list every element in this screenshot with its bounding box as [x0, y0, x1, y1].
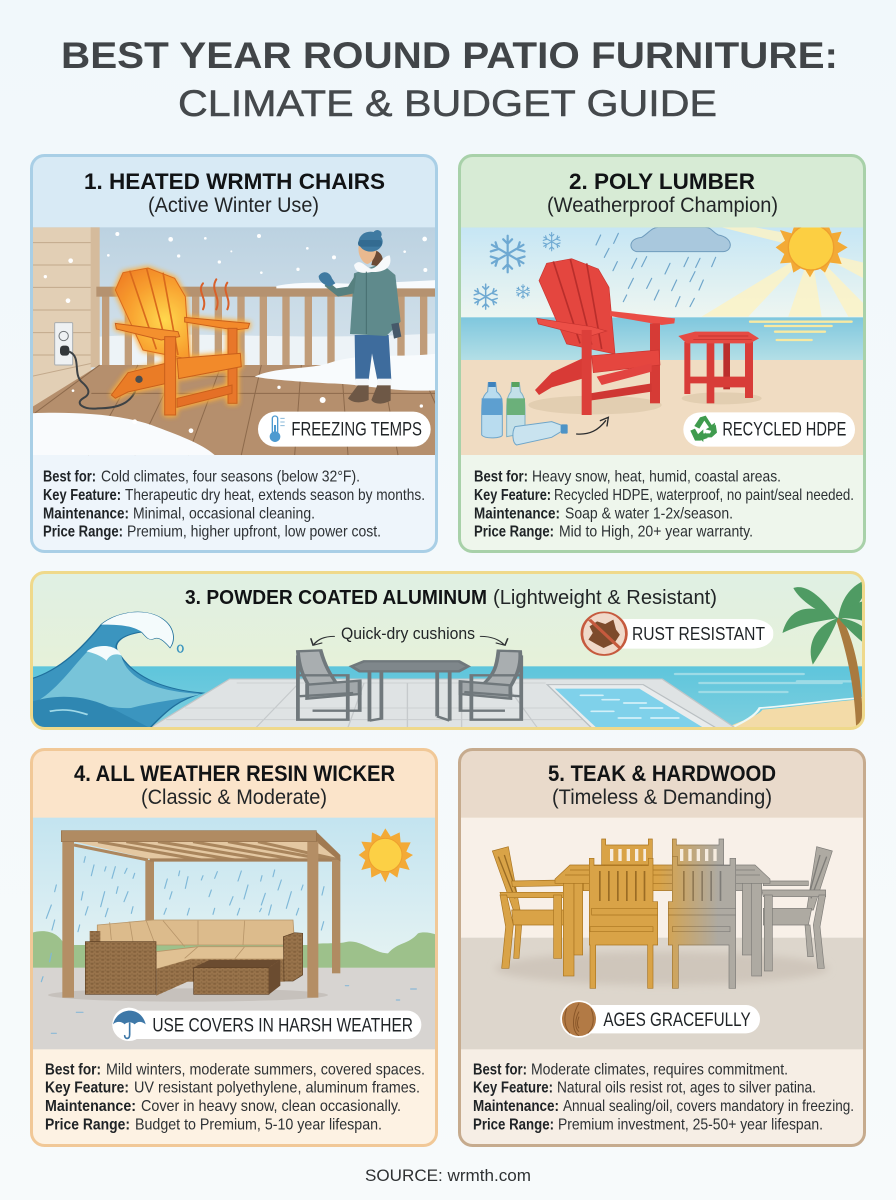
details: panel 1 [43, 469, 425, 541]
details: panel 4: Cover in heavy snow, clean occasionally. [141, 1098, 401, 1115]
details: panel 4: Price Range: [45, 1116, 130, 1133]
details: panel 5 [473, 1061, 854, 1133]
heading: panel 5: (Timeless & Demanding) [552, 786, 772, 809]
heading: panel 4 [74, 761, 395, 809]
illustration: aging teak dining set [457, 818, 865, 1049]
rain [41, 857, 324, 982]
badge: recycled hdpe [683, 412, 855, 447]
details: panel 1: Maintenance: [43, 505, 129, 522]
illustration: winter deck with heated chair [30, 227, 440, 455]
icon: recycled bottles [482, 382, 568, 445]
details: panel 4: Key Feature: [45, 1080, 129, 1097]
details: panel 5: Premium investment, 25-50+ year lifespan. [558, 1116, 823, 1133]
details: panel 4: Maintenance: [45, 1098, 136, 1115]
pool [547, 685, 716, 728]
badge: use covers [112, 1008, 421, 1041]
heading: panel 1: 1. HEATED WRMTH CHAIRS [84, 169, 385, 194]
right armchair [762, 847, 832, 971]
details: panel 2: Price Range: [474, 524, 554, 541]
source line: SOURCE: wrmth.com [365, 1166, 531, 1185]
details: panel 5: Moderate climates, requires commitment. [531, 1061, 788, 1078]
icon: wood grain [560, 1000, 598, 1038]
details: panel 1: Minimal, occasional cleaning. [133, 505, 315, 522]
details: panel 5: Natural oils resist rot, ages to silver patina. [557, 1080, 816, 1097]
details: panel 1: Premium, higher upfront, low power cost. [127, 524, 381, 541]
heading: panel 2 [547, 169, 778, 217]
heading: panel 3 [185, 586, 717, 609]
badge: ages gracefully: AGES GRACEFULLY [603, 1010, 751, 1031]
red side table [678, 332, 759, 403]
left armchair [492, 847, 563, 968]
front chairs [589, 857, 736, 988]
icon: rain cloud [596, 227, 730, 307]
details: panel 2: Key Feature: [474, 487, 551, 504]
panel: teak and hardwood [457, 748, 866, 1148]
title [61, 35, 838, 124]
back chairs [602, 839, 724, 865]
wave [28, 612, 203, 728]
snowfall [44, 232, 427, 433]
details: panel 1: Cold climates, four seasons (below 32°F). [101, 469, 360, 486]
details: panel 2: Heavy snow, heat, humid, coastal areas. [532, 469, 781, 486]
label: quick-dry cushions: Quick-dry cushions [341, 625, 475, 643]
heading: panel 4: (Classic & Moderate) [141, 786, 327, 809]
details: panel 5: Maintenance: [473, 1098, 559, 1115]
icon: wall outlet and cord [55, 323, 139, 409]
details: panel 5: Best for: [473, 1061, 527, 1078]
left chair [298, 650, 360, 720]
details: panel 1: Therapeutic dry heat, extends season by months. [125, 487, 425, 504]
details: panel 2: Maintenance: [474, 505, 560, 522]
details: panel 5: Key Feature: [473, 1080, 553, 1097]
details: panel 4: Budget to Premium, 5-10 year lifespan. [135, 1116, 382, 1133]
icons: snowflakes [474, 232, 560, 309]
panel: poly lumber [457, 154, 867, 553]
right chair [461, 651, 521, 720]
heading: panel 2: (Weatherproof Champion) [547, 194, 778, 217]
details: panel 1: Price Range: [43, 524, 123, 541]
icon: heat waves [201, 279, 229, 309]
icon: no rust [582, 612, 626, 655]
furniture: aluminum table and chairs [298, 650, 521, 721]
title: BEST YEAR ROUND PATIO FURNITURE: [61, 35, 838, 76]
badge: freezing temps [258, 412, 431, 447]
heated chair [111, 268, 250, 415]
icon: thermometer [270, 416, 285, 442]
red adirondack chair [535, 259, 675, 415]
panel: powder coated aluminum [28, 568, 882, 733]
icon: umbrella [113, 1011, 146, 1038]
arrows: cushion callouts [311, 636, 508, 645]
details: panel 4: Mild winters, moderate summers, covered spaces. [106, 1061, 425, 1078]
badge: use covers: USE COVERS IN HARSH WEATHER [152, 1015, 413, 1036]
icon: recycle [690, 416, 717, 442]
heading: panel 3: 3. POWDER COATED ALUMINUM [185, 586, 487, 609]
details: panel 2: Best for: [474, 469, 528, 486]
illustration: pergola and wicker sectional [30, 818, 440, 1049]
table [352, 661, 468, 721]
icon: sun [776, 228, 848, 278]
heading: panel 1: (Active Winter Use) [148, 194, 319, 217]
heading: panel 1 [84, 169, 385, 217]
details: panel 1: Best for: [43, 469, 96, 486]
illustration: pool deck and wave [28, 568, 882, 733]
table [555, 865, 770, 976]
wicker coffee table [193, 960, 280, 994]
details: panel 4: Best for: [45, 1061, 101, 1078]
details: panel 2: Mid to High, 20+ year warranty. [559, 524, 753, 541]
badge: recycled hdpe: RECYCLED HDPE [722, 419, 846, 440]
palm tree [782, 582, 862, 726]
badge: freezing temps: FREEZING TEMPS [291, 419, 422, 440]
illustration: beach with red chair [457, 217, 867, 455]
details: panel 5: Price Range: [473, 1116, 554, 1133]
title: CLIMATE & BUDGET GUIDE [178, 83, 717, 124]
details: panel 4 [45, 1061, 425, 1133]
panel: heated wrmth chairs [30, 154, 440, 553]
patio [150, 679, 735, 728]
badge: ages gracefully [560, 1000, 760, 1038]
details: panel 1: Key Feature: [43, 487, 121, 504]
heading: panel 3: (Lightweight & Resistant) [493, 586, 717, 609]
heading: panel 5 [548, 761, 776, 809]
heading: panel 5: 5. TEAK & HARDWOOD [548, 761, 776, 786]
details: panel 2 [474, 469, 854, 541]
pergola [74, 832, 340, 973]
icon: sun [359, 828, 413, 882]
person in winter coat [319, 230, 401, 404]
heading: panel 4: 4. ALL WEATHER RESIN WICKER [74, 761, 395, 786]
label: rust resistant: RUST RESISTANT [632, 624, 765, 644]
details: panel 4: UV resistant polyethylene, aluminum frames. [134, 1080, 420, 1097]
heading: panel 2: 2. POLY LUMBER [569, 169, 755, 194]
panel: all weather resin wicker [30, 748, 440, 1148]
badge: rust resistant [582, 612, 773, 655]
wicker sectional [85, 920, 303, 996]
details: panel 2: Soap & water 1-2x/season. [565, 505, 733, 522]
arrow: bottles to chair [577, 417, 608, 434]
